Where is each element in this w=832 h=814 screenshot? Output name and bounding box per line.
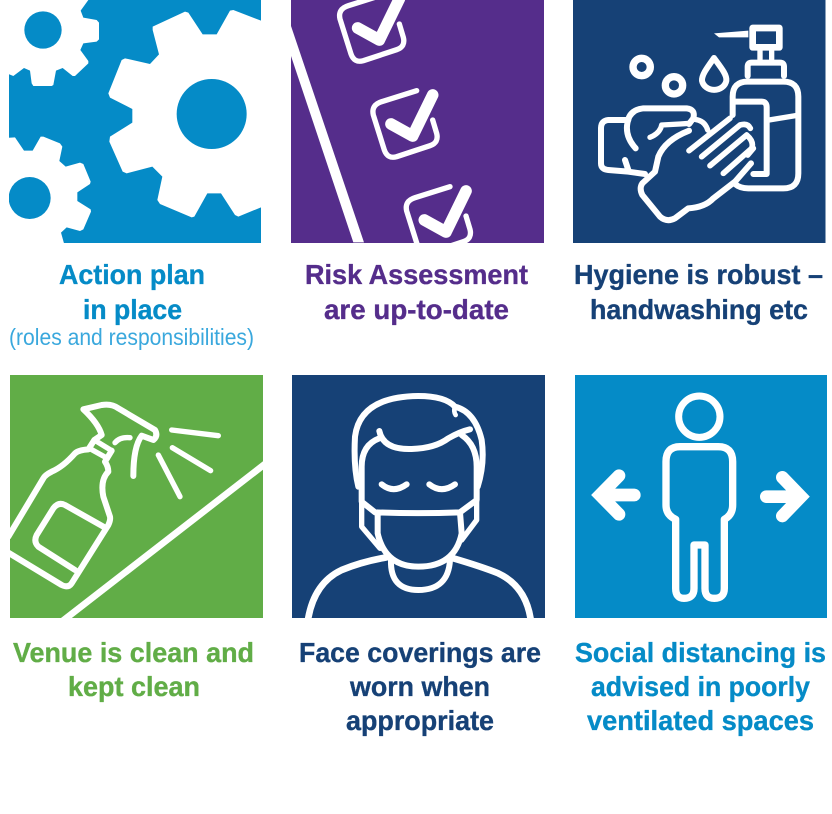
heading: risk assessment: Risk Assessment bbox=[305, 259, 528, 290]
heading: venue clean bbox=[13, 637, 254, 702]
heading: hygiene: Hygiene is robust – bbox=[574, 259, 823, 290]
heading: social distancing: Social distancing is bbox=[575, 637, 826, 668]
heading: risk assessment bbox=[305, 259, 528, 325]
panel: social distancing bbox=[575, 375, 827, 736]
heading: hygiene: handwashing etc bbox=[590, 294, 808, 325]
tile background purple bbox=[291, 0, 544, 243]
heading: action plan: Action plan bbox=[59, 259, 205, 290]
panel: risk assessment bbox=[291, 0, 544, 325]
heading: social distancing bbox=[575, 637, 826, 736]
heading: venue clean: kept clean bbox=[68, 671, 200, 702]
heading: risk assessment: are up-to-date bbox=[324, 294, 509, 325]
heading: action plan: (roles and responsibilities) bbox=[9, 324, 254, 350]
tile background navy bbox=[292, 375, 545, 618]
panel: venue clean bbox=[7, 375, 267, 702]
heading: face coverings: worn when bbox=[349, 671, 490, 702]
icon: gears bbox=[0, 0, 267, 243]
panel: action plan bbox=[0, 0, 267, 350]
panel: hygiene bbox=[573, 0, 826, 325]
tile background navy bbox=[573, 0, 826, 243]
heading: social distancing: ventilated spaces bbox=[587, 705, 814, 736]
icon: spray bottle bbox=[7, 405, 267, 622]
icon: checklist bbox=[291, 0, 470, 253]
heading: face coverings: appropriate bbox=[346, 705, 494, 736]
icon: person with mask bbox=[308, 396, 531, 622]
tile background blue bbox=[9, 0, 261, 243]
heading: face coverings: Face coverings are bbox=[299, 637, 541, 668]
tile background green bbox=[10, 375, 263, 618]
heading: social distancing: advised in poorly bbox=[591, 671, 810, 702]
icon: hands and soap dispenser bbox=[601, 28, 798, 220]
heading: action plan bbox=[9, 259, 254, 350]
heading: hygiene bbox=[574, 259, 823, 325]
heading: venue clean: Venue is clean and bbox=[13, 637, 254, 668]
heading: face coverings bbox=[299, 637, 541, 736]
panel: face coverings bbox=[292, 375, 545, 736]
tile background blue bbox=[575, 375, 827, 618]
icon: person with arrows bbox=[600, 396, 801, 598]
heading: action plan: in place bbox=[83, 294, 182, 325]
